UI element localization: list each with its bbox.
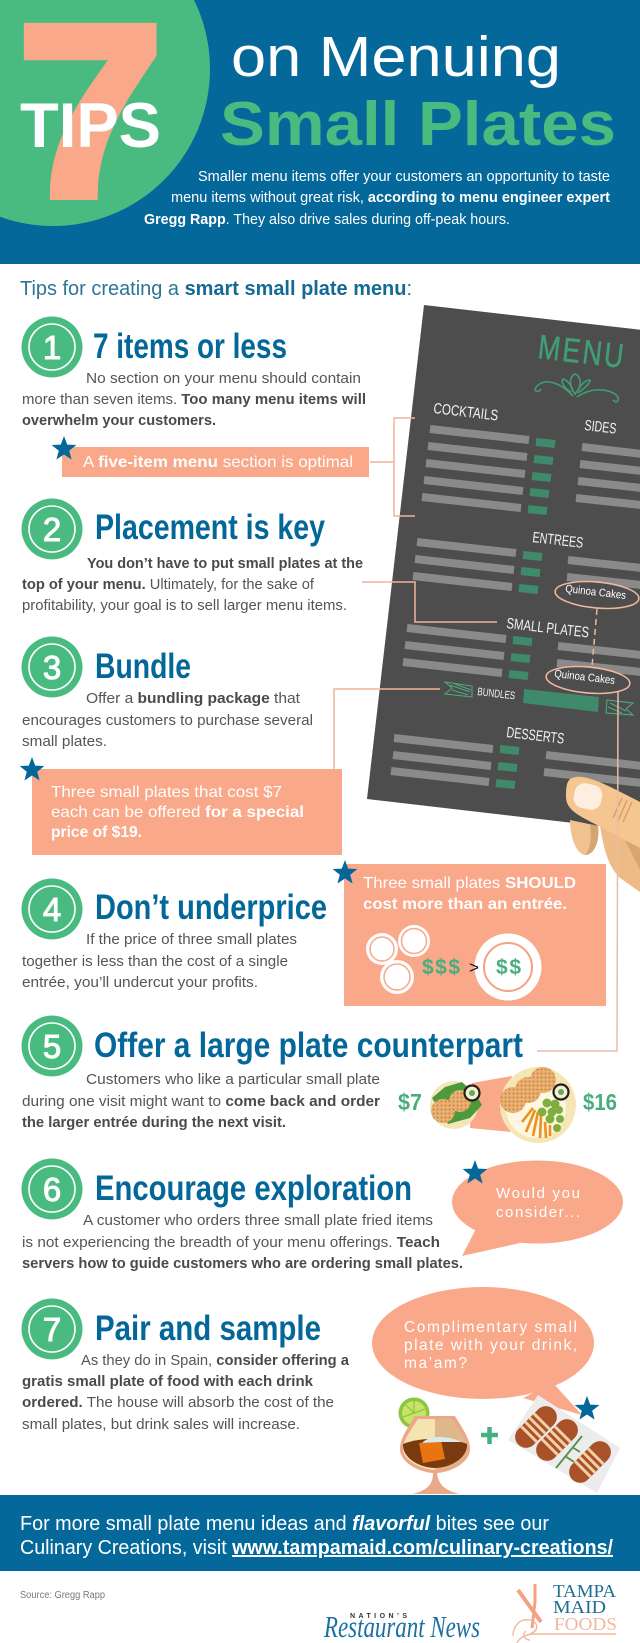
body: encourages customers to purchase several (22, 712, 313, 729)
body (22, 555, 363, 614)
headline: Small Plates: Small Plates (220, 90, 616, 159)
small plate (430, 1081, 482, 1129)
number badge 3: 3 (43, 649, 61, 686)
quinoa cakes oval bottom (545, 666, 631, 694)
callout: price of $19. (51, 824, 142, 841)
number badge 2: 2 (43, 511, 61, 548)
number badge 1 (22, 316, 82, 378)
connector: tip 2 to small plates (362, 582, 497, 622)
intro text: menu items without great risk, according to menu engineer expert (171, 189, 610, 206)
body: No section on your menu should contain (86, 370, 361, 387)
body (22, 931, 297, 991)
callout (20, 757, 342, 855)
palm (600, 826, 640, 892)
body: As they do in Spain, consider offering a (81, 1352, 350, 1369)
star (20, 757, 44, 780)
intro text: Gregg Rapp. They also drive sales during off-peak hours. (144, 211, 510, 228)
body: top of your menu. Ultimately, for the sake of (22, 576, 315, 593)
body: is not experiencing the breadth of your menu offerings. Teach (22, 1234, 440, 1251)
icon: plus (481, 1427, 498, 1444)
speech bubble: plate with your drink, (404, 1337, 577, 1354)
callout: Three small plates that cost $7 (51, 784, 282, 801)
heading: Placement is key (95, 508, 325, 547)
entree plate: $$ (496, 956, 521, 979)
star (575, 1396, 599, 1420)
hand (566, 777, 640, 892)
body: overwhelm your customers. (22, 412, 216, 429)
speech bubble (372, 1287, 594, 1415)
thumb (566, 777, 640, 848)
heading: Don’t underprice (95, 888, 327, 927)
number badge 2 (22, 498, 82, 560)
logo: Tampa Maid Foods: MAID (553, 1597, 606, 1617)
body (22, 370, 366, 429)
number badge 4 (22, 878, 82, 940)
header banner (0, 0, 640, 264)
body: Customers who like a particular small plate (86, 1071, 380, 1088)
bundle flag left (445, 682, 472, 697)
number badge 5 (22, 1016, 82, 1076)
tip 2 (22, 498, 363, 614)
logo: Tampa Maid Foods: TAMPA (553, 1581, 616, 1601)
connector: tip 1 bracket (370, 418, 415, 516)
body: A customer who orders three small plate fried items (83, 1212, 433, 1229)
heading: Encourage exploration (95, 1169, 412, 1208)
thumb nail (572, 781, 604, 812)
tip 3 (20, 636, 342, 855)
quinoa cakes oval top (554, 580, 640, 610)
thumb creases (613, 798, 632, 822)
heading: Pair and sample (95, 1309, 321, 1348)
body: small plates. (22, 733, 107, 750)
three small plates price: $$$ (422, 956, 460, 979)
body (22, 690, 313, 750)
quinoa cakes oval bottom: Quinoa Cakes (554, 668, 616, 687)
number badge 1: 1 (43, 329, 61, 366)
body: ordered. The house will absorb the cost of the (22, 1394, 334, 1411)
price: large: $16 (583, 1089, 617, 1115)
body: entrée, you’ll undercut your profits. (22, 974, 258, 991)
heading: 7 items or less (93, 327, 287, 366)
bundle bar (523, 689, 599, 712)
green circle (0, 0, 210, 226)
price: small: $7 (398, 1089, 422, 1115)
entree plate (474, 934, 542, 1000)
speech bubble (452, 1160, 623, 1256)
quinoa cakes oval top: Quinoa Cakes (565, 583, 627, 602)
callout with plates: cost more than an entrée. (363, 896, 567, 913)
body (22, 1352, 350, 1433)
callout with plates: Three small plates SHOULD (363, 875, 576, 892)
greater than: > (469, 958, 479, 977)
body (22, 1071, 380, 1131)
bundle flag right (606, 700, 633, 715)
number badge 6 (22, 1158, 82, 1220)
body: gratis small plate of food with each drink (22, 1373, 314, 1390)
body: together is less than the cost of a single (22, 953, 288, 970)
logo: Nation's Restaurant News: Restaurant News (323, 1609, 480, 1643)
number badge 7: 7 (43, 1311, 61, 1348)
body: servers how to guide customers who are ordering small plates. (22, 1255, 463, 1272)
logo: Tampa Maid Foods (513, 1581, 617, 1643)
intro text (144, 168, 610, 228)
headline: on Menuing: on Menuing (231, 25, 561, 89)
callout: A five-item menu section is optimal (83, 454, 353, 471)
connector: tip 3 to bundles (334, 689, 440, 769)
body: If the price of three small plates (86, 931, 297, 948)
body: profitability, your goal is to sell larger menu items. (22, 597, 347, 614)
callout (52, 436, 369, 477)
star (333, 860, 357, 884)
menu illustration: ENTREES (532, 529, 584, 552)
body: the larger entrée during the next visit. (22, 1114, 286, 1131)
footer banner: Culinary Creations, visit www.tampamaid.com/culinary-creations/ (20, 1537, 613, 1559)
plate comparison illustration (430, 1067, 576, 1143)
menu illustration: SMALL PLATES (506, 615, 590, 642)
logo: Nation's Restaurant News: NATION’S (350, 1613, 407, 1620)
tip 6 (22, 1158, 623, 1272)
number badge 7 (22, 1298, 82, 1360)
number badge 4: 4 (43, 891, 61, 928)
menu illustration: DESSERTS (506, 724, 565, 748)
fork and knife with swirl (513, 1584, 616, 1643)
body (22, 1212, 463, 1272)
speech bubble: ma’am? (404, 1355, 467, 1372)
TIPS label: TIPS (20, 91, 161, 161)
subheading: Tips for creating a smart small plate menu: (20, 278, 412, 300)
icon: small plate food (508, 1395, 620, 1493)
menu item bars (391, 429, 640, 785)
connector: quinoa cakes to tip 5 (537, 692, 618, 1051)
heading: Bundle (95, 647, 191, 686)
body: more than seven items. Too many menu items will (22, 391, 366, 408)
icon: cocktail glass (398, 1398, 470, 1494)
tip 7 (22, 1287, 620, 1494)
body: during one visit might want to come back and order (22, 1093, 380, 1110)
flourish (535, 374, 618, 402)
heading: Offer a large plate counterpart (94, 1026, 523, 1065)
price markers (496, 442, 555, 785)
lower finger (570, 820, 598, 855)
speech bubble: Complimentary small (404, 1319, 577, 1336)
footer banner (0, 1495, 640, 1571)
body: You don’t have to put small plates at the (87, 555, 363, 572)
footer banner: For more small plate menu ideas and flavorful bites see our (20, 1513, 549, 1535)
star (463, 1160, 487, 1184)
section labels: COCKTAILS (433, 400, 499, 424)
body: small plates, but drink sales will increase. (22, 1416, 300, 1433)
star (52, 436, 76, 460)
large plate (500, 1067, 576, 1143)
logo: Tampa Maid Foods: FOODS (554, 1614, 617, 1634)
intro text: Smaller menu items offer your customers an opportunity to taste (198, 168, 610, 185)
number badge 6: 6 (43, 1171, 61, 1208)
body: Offer a bundling package that (86, 690, 301, 707)
number badge 3 (22, 636, 82, 698)
speech bubble: Would you (496, 1185, 580, 1202)
callout: each can be offered for a special (51, 804, 304, 821)
tip 5 (22, 1016, 617, 1143)
number badge 5: 5 (43, 1028, 61, 1065)
tip 4 (22, 860, 606, 1006)
speech bubble: consider... (496, 1204, 580, 1221)
menu illustration (367, 305, 640, 833)
three small plates (366, 925, 430, 994)
source note: Source: Gregg Rapp (20, 1590, 105, 1601)
menu illustration: SIDES (584, 417, 617, 438)
callout with plates (333, 860, 606, 1006)
tip 1 (22, 316, 369, 477)
dashed link between ovals (592, 609, 597, 667)
menu illustration: BUNDLES (477, 686, 516, 702)
